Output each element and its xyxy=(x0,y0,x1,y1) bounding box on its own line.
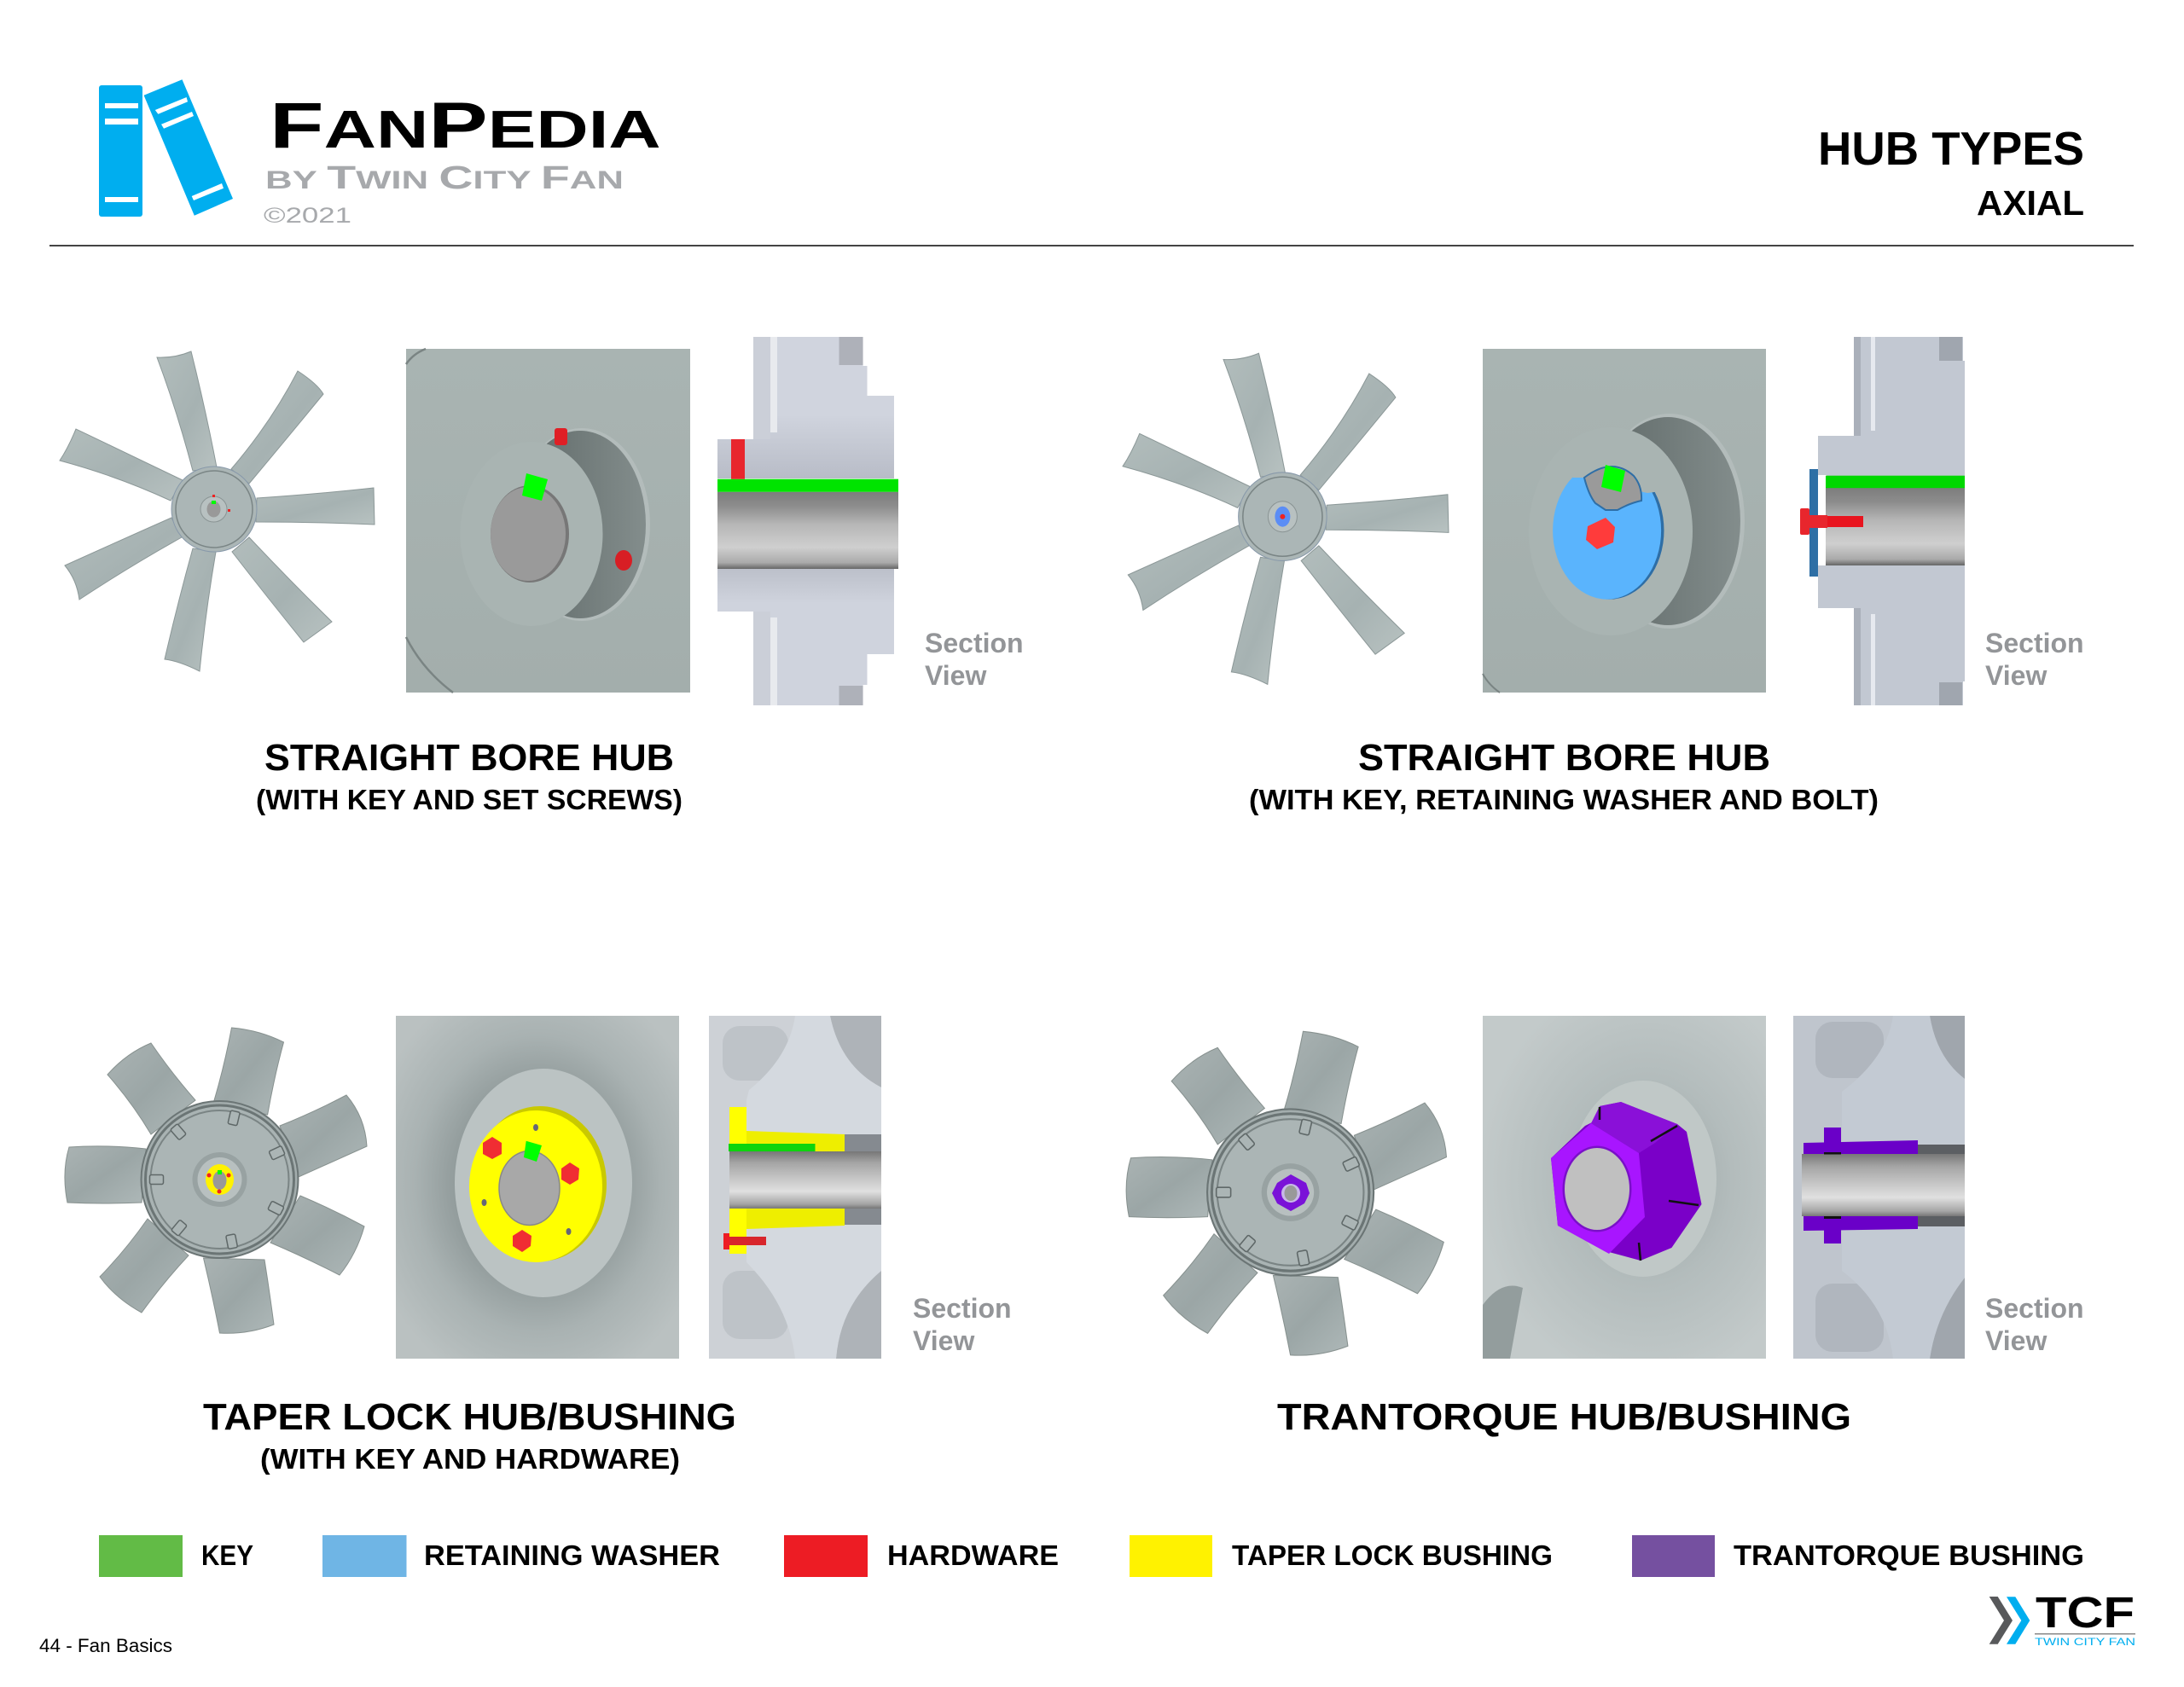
subheading: (WITH KEY AND HARDWARE) xyxy=(260,1443,680,1475)
header logo: FanPedia xyxy=(99,79,661,228)
section view label: View xyxy=(913,1325,974,1356)
fan illustration xyxy=(1126,1031,1446,1355)
TCF logo: TWIN CITY FAN xyxy=(2035,1636,2135,1648)
legend item: key xyxy=(99,1535,253,1577)
page title xyxy=(1818,122,2084,223)
legend item: trantorque bushing xyxy=(1632,1535,2084,1577)
panel: straight bore hub with key and set screws xyxy=(60,337,1024,815)
section view xyxy=(1793,1016,1965,1359)
legend item: retaining washer: RETAINING WASHER xyxy=(424,1539,720,1571)
fan illustration xyxy=(1123,353,1449,684)
panel: taper lock hub and bushing xyxy=(65,1016,1012,1475)
page footer: 44 - Fan Basics xyxy=(39,1635,172,1656)
TCF logo: TCF xyxy=(2036,1588,2135,1637)
panel: trantorque hub and bushing xyxy=(1126,1016,2084,1438)
legend item: key: KEY xyxy=(201,1539,253,1571)
fan illustration xyxy=(65,1028,367,1333)
legend xyxy=(99,1535,2084,1577)
legend item: taper lock bushing: TAPER LOCK BUSHING xyxy=(1232,1539,1553,1571)
hub closeup xyxy=(406,349,690,693)
heading: STRAIGHT BORE HUB xyxy=(264,737,674,779)
heading: TRANTORQUE HUB/BUSHING xyxy=(1277,1396,1851,1438)
section view label: Section xyxy=(925,628,1024,658)
byline: BY TWIN CITY FAN xyxy=(265,159,624,196)
page title: HUB TYPES xyxy=(1818,122,2084,175)
panel: straight bore hub with key, retaining washer and bolt xyxy=(1123,337,2084,815)
section view label: Section xyxy=(913,1293,1012,1324)
section view label: View xyxy=(1985,1325,2047,1356)
page subtitle: AXIAL xyxy=(1977,183,2084,223)
section view xyxy=(709,1016,881,1359)
heading: TAPER LOCK HUB/BUSHING xyxy=(203,1396,736,1438)
section view xyxy=(1800,337,1965,705)
hub closeup xyxy=(396,1016,679,1359)
subheading: (WITH KEY AND SET SCREWS) xyxy=(256,784,682,815)
section view label: Section xyxy=(1985,628,2084,658)
header rule xyxy=(49,245,2134,246)
legend item: taper lock bushing xyxy=(1130,1535,1553,1577)
section view label: Section xyxy=(1985,1293,2084,1324)
hub closeup xyxy=(1483,349,1766,693)
icon: blue books xyxy=(99,79,233,217)
legend item: retaining washer xyxy=(322,1535,720,1577)
subheading: (WITH KEY, RETAINING WASHER AND BOLT) xyxy=(1249,784,1879,815)
hub closeup xyxy=(1483,1016,1766,1359)
legend item: trantorque bushing: TRANTORQUE BUSHING xyxy=(1734,1539,2084,1571)
section view xyxy=(717,337,898,705)
copyright: ©2021 xyxy=(264,205,351,228)
fan illustration xyxy=(60,351,375,671)
wordmark: FANPEDIA xyxy=(270,90,661,162)
TCF logo xyxy=(1989,1588,2135,1648)
section view label: View xyxy=(925,660,986,691)
heading: STRAIGHT BORE HUB xyxy=(1358,737,1770,779)
section view label: View xyxy=(1985,660,2047,691)
legend item: hardware: HARDWARE xyxy=(887,1539,1059,1571)
legend item: hardware xyxy=(784,1535,1059,1577)
